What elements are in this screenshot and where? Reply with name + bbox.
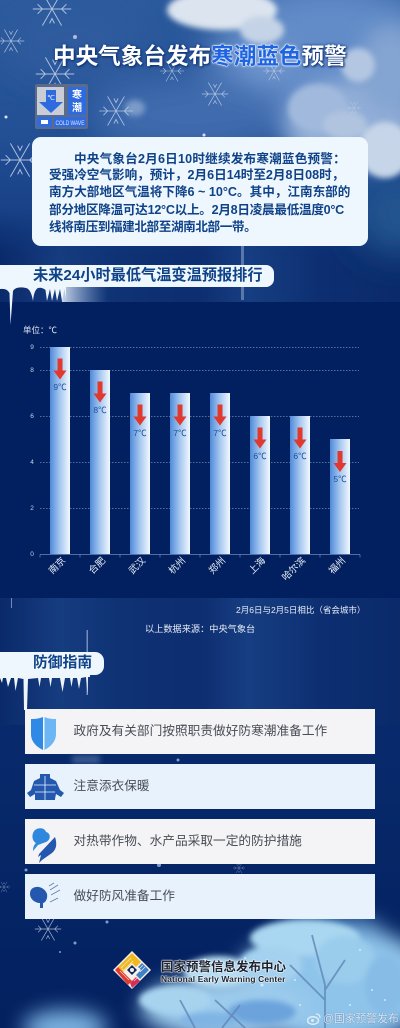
panel: guide item 1: 政府及有关部门按照职责做好防寒潮准备工作 [74,724,327,738]
panel: guide item 4: 做好防风准备工作 [74,889,175,903]
icon: cold wave blue warning badge: 寒 [72,86,82,101]
snowflakes [33,0,71,26]
red arrows [54,358,346,472]
icon: tropical crop protection [32,828,56,863]
panel: guide item 3 [25,819,375,864]
icon: shield [31,717,56,750]
panel: guide item 3: 对热带作物、水产品采取一定的防护措施 [74,834,302,848]
bar chart: 2 [30,505,34,512]
bar chart [23,325,360,583]
panel: guide item 4 [25,874,375,919]
city labels: 南京 [46,555,68,577]
panel: guide item 1 [25,709,375,754]
city labels: 哈尔滨 [279,554,308,583]
icon: cold wave blue warning badge: ℃ [47,95,55,102]
icon: cold wave blue warning badge [35,84,88,129]
text block: warning summary: 南方大部地区气温将下降6 ~ 10°C。其中，江南东部的 [49,185,350,199]
bar chart: 4 [30,459,34,466]
city labels: 福州 [326,555,348,577]
bar chart: 8 [30,367,34,374]
bar value labels: 5℃ [333,474,347,484]
logo text: 国家预警信息发布中心 [161,960,286,974]
bar value labels: 9℃ [53,382,67,392]
icon: cold wave blue warning badge: 潮 [72,99,82,114]
light streaks [241,246,244,300]
watermark: @国家预警发布 [323,1013,399,1025]
bar chart: 单位：℃ [23,325,58,335]
text block: warning summary: 线将南压到福建北部至湖南北部一带。 [49,220,256,234]
city labels: 武汉 [126,554,148,577]
heading: defense guide: 防御指南 [33,655,92,671]
city labels: 杭州 [166,555,188,577]
city labels [46,554,348,583]
bars [50,347,350,554]
icon: padded jacket [27,774,64,800]
city labels: 郑州 [206,555,228,577]
bar value labels: 8℃ [93,405,107,415]
bar value labels [53,382,347,484]
bar value labels: 6℃ [293,451,307,461]
panel: guide item 2: 注意添衣保暖 [74,779,150,793]
icicles under chart heading [0,287,104,324]
logo text [160,958,287,985]
heading: 24-hour ranking: 未来24小时最低气温变温预报排行 [33,267,263,284]
heading: 24-hour ranking [0,265,274,287]
icon: wind blowing tree [30,882,60,908]
heading: defense guide [0,652,104,675]
text block: warning summary [32,137,368,246]
icicles under guide heading [0,675,90,710]
text block: warning summary: 部分地区降温可达12°C以上。2月8日凌晨最低温度0°C [49,203,344,217]
chart footnote: 2月6日与2月5日相比（省会城市） [236,605,365,615]
logo text: National Early Warning Center [161,974,286,984]
panel: guide item 2 [25,764,375,809]
bar chart: 0 [30,551,34,558]
city labels: 上海 [246,554,268,577]
bar value labels: 7℃ [173,428,187,438]
upper clouds [0,0,400,255]
bar value labels: 7℃ [133,428,147,438]
title: 中央气象台发布寒潮蓝色预警 [53,44,347,69]
city labels: 合肥 [86,554,108,577]
data source: 以上数据来源：中央气象台 [145,624,255,634]
text block: warning summary: 受强冷空气影响，预计，2月6日14时至2月8日08时， [49,168,344,182]
panel: chart background [0,302,400,598]
icon: national early warning center logo [113,951,151,989]
bar value labels: 7℃ [213,428,227,438]
bottom trees [23,915,400,1028]
bar chart: 6 [30,413,34,420]
text block: warning summary: 中央气象台2月6日10时继续发布寒潮蓝色预警： [74,152,346,166]
bar value labels: 6℃ [253,451,267,461]
bar chart: 9 [30,344,34,351]
